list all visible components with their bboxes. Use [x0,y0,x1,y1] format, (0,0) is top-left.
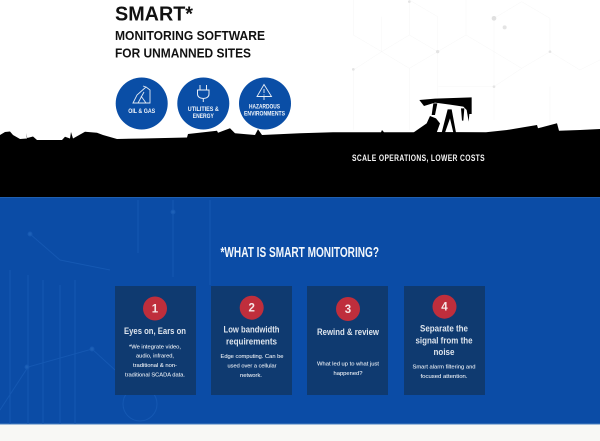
subheading: monitoring software: MONITORING SOFTWARE [115,28,265,43]
card 1 body: *We integrate video, [129,344,181,350]
icon: oil derrick [133,86,150,103]
panel: card 4 [404,286,485,395]
badge: hazardous environments: HAZARDOUS [249,104,280,110]
card 2 body [220,354,284,379]
icon: warning triangle [257,84,272,100]
badge: oil and gas: OIL & GAS [128,108,156,115]
card 3 title: Rewind & review [317,327,380,337]
card 4 title: Separate the [420,324,468,334]
card 1 title: Eyes on, Ears on [124,326,186,336]
badge 3: 3 [345,304,351,316]
card 1 body [125,344,185,378]
card 1 body: traditional & non- [133,363,177,369]
panel: card 3 [307,286,388,395]
card 1 body: audio, infrared, [136,354,174,360]
bottom band [0,424,600,441]
heading: what is smart monitoring: *WHAT IS SMART MONITORING? [220,245,379,261]
card 3 body: What led up to what just [317,362,379,368]
badge: utilities and energy: UTILITIES & [188,106,219,113]
card 1 body: traditional SCADA data. [125,372,185,378]
card 4 title [416,324,472,357]
card 3 body [317,362,379,377]
subheading: monitoring software: FOR UNMANNED SITES [115,46,251,60]
card 4 title: signal from the [416,335,472,345]
badge 1: 1 [152,304,159,316]
card 2 title [224,325,280,346]
badge: oil and gas [116,78,168,130]
badge: hazardous environments [239,78,291,130]
card 2 title: requirements [226,336,277,346]
icon: pump jack silhouette [413,97,472,133]
subheading: monitoring software [115,28,265,60]
badge: hazardous environments: ENVIRONMENTS [244,110,286,118]
badge 2: 2 [248,303,255,315]
panel: card 2 [211,286,292,395]
card 4 body: focused attention. [420,374,468,380]
card 4 body: Smart alarm filtering and [412,365,476,371]
badge: utilities and energy [177,78,229,130]
card 2 body: Edge computing. Can be [220,354,284,360]
panel: card 1 [115,286,196,395]
card 2 body: used over a cellular [228,364,277,370]
card 2 body: network. [240,373,262,379]
black landscape silhouette [0,123,600,197]
card 4 title: noise [434,347,454,357]
badge 4: 4 [441,302,448,314]
panel: blue section [0,197,600,424]
badge: utilities and energy: ENERGY [193,113,214,120]
card 3 body: happened? [334,371,362,377]
icon: plug [198,85,209,102]
heading: SMART: SMART* [115,4,193,26]
tagline: SCALE OPERATIONS, LOWER COSTS [352,153,485,164]
card 2 title: Low bandwidth [224,325,280,335]
card 4 body [412,365,476,380]
